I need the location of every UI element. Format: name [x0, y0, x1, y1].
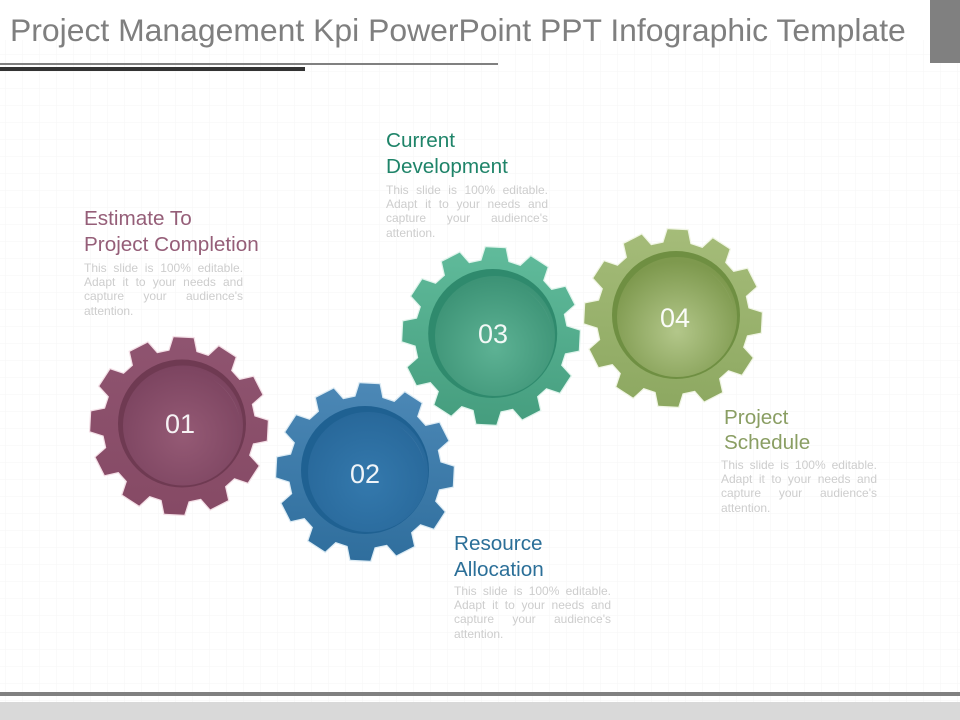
body text: capture your audience's	[84, 289, 243, 303]
gear 01: 01	[165, 409, 195, 439]
body text: Adapt it to your needs and	[454, 598, 611, 612]
heading: Development	[386, 155, 508, 178]
body text: This slide is 100% editable.	[721, 458, 877, 472]
body text: This slide is 100% editable.	[454, 584, 611, 598]
heading: Schedule	[724, 431, 810, 454]
panel: resource allocation	[454, 532, 611, 641]
panel: current development	[386, 129, 548, 240]
heading: Estimate To	[84, 207, 192, 230]
body text: Adapt it to your needs and	[84, 275, 243, 289]
heading: Project	[724, 406, 788, 429]
body text	[721, 458, 877, 515]
heading: Current	[386, 129, 455, 152]
body text: attention.	[386, 226, 435, 240]
gear 03: 03	[478, 319, 508, 349]
gear 02: 02	[350, 459, 380, 489]
footer line	[0, 692, 960, 696]
panel: estimate to project completion	[84, 207, 259, 318]
heading	[386, 129, 508, 178]
gear 04: 04	[660, 303, 690, 333]
body text: attention.	[454, 627, 503, 641]
heading	[454, 532, 544, 581]
panel: project schedule	[721, 406, 877, 515]
body text	[386, 183, 548, 240]
heading: Allocation	[454, 558, 544, 581]
body text: capture your audience's	[386, 211, 548, 225]
body text: Adapt it to your needs and	[386, 197, 548, 211]
body text: capture your audience's	[721, 486, 877, 500]
gear 01	[86, 333, 272, 519]
corner block	[930, 0, 960, 63]
heading	[724, 406, 810, 454]
footer band	[0, 702, 960, 720]
gear 02	[272, 379, 458, 565]
heading: Resource	[454, 532, 543, 555]
body text: attention.	[721, 501, 770, 515]
title: Project Management Kpi PowerPoint PPT Infographic Template	[10, 12, 906, 48]
body text: This slide is 100% editable.	[84, 261, 243, 275]
heading: Project Completion	[84, 233, 259, 256]
gear 03	[398, 243, 584, 429]
title underline thick	[0, 67, 305, 71]
body text	[84, 261, 243, 318]
title underline thin	[0, 63, 498, 65]
body text	[454, 584, 611, 641]
gear 04	[580, 225, 766, 411]
body text: attention.	[84, 304, 133, 318]
body text: This slide is 100% editable.	[386, 183, 548, 197]
body text: capture your audience's	[454, 612, 611, 626]
heading	[84, 207, 259, 256]
body text: Adapt it to your needs and	[721, 472, 877, 486]
